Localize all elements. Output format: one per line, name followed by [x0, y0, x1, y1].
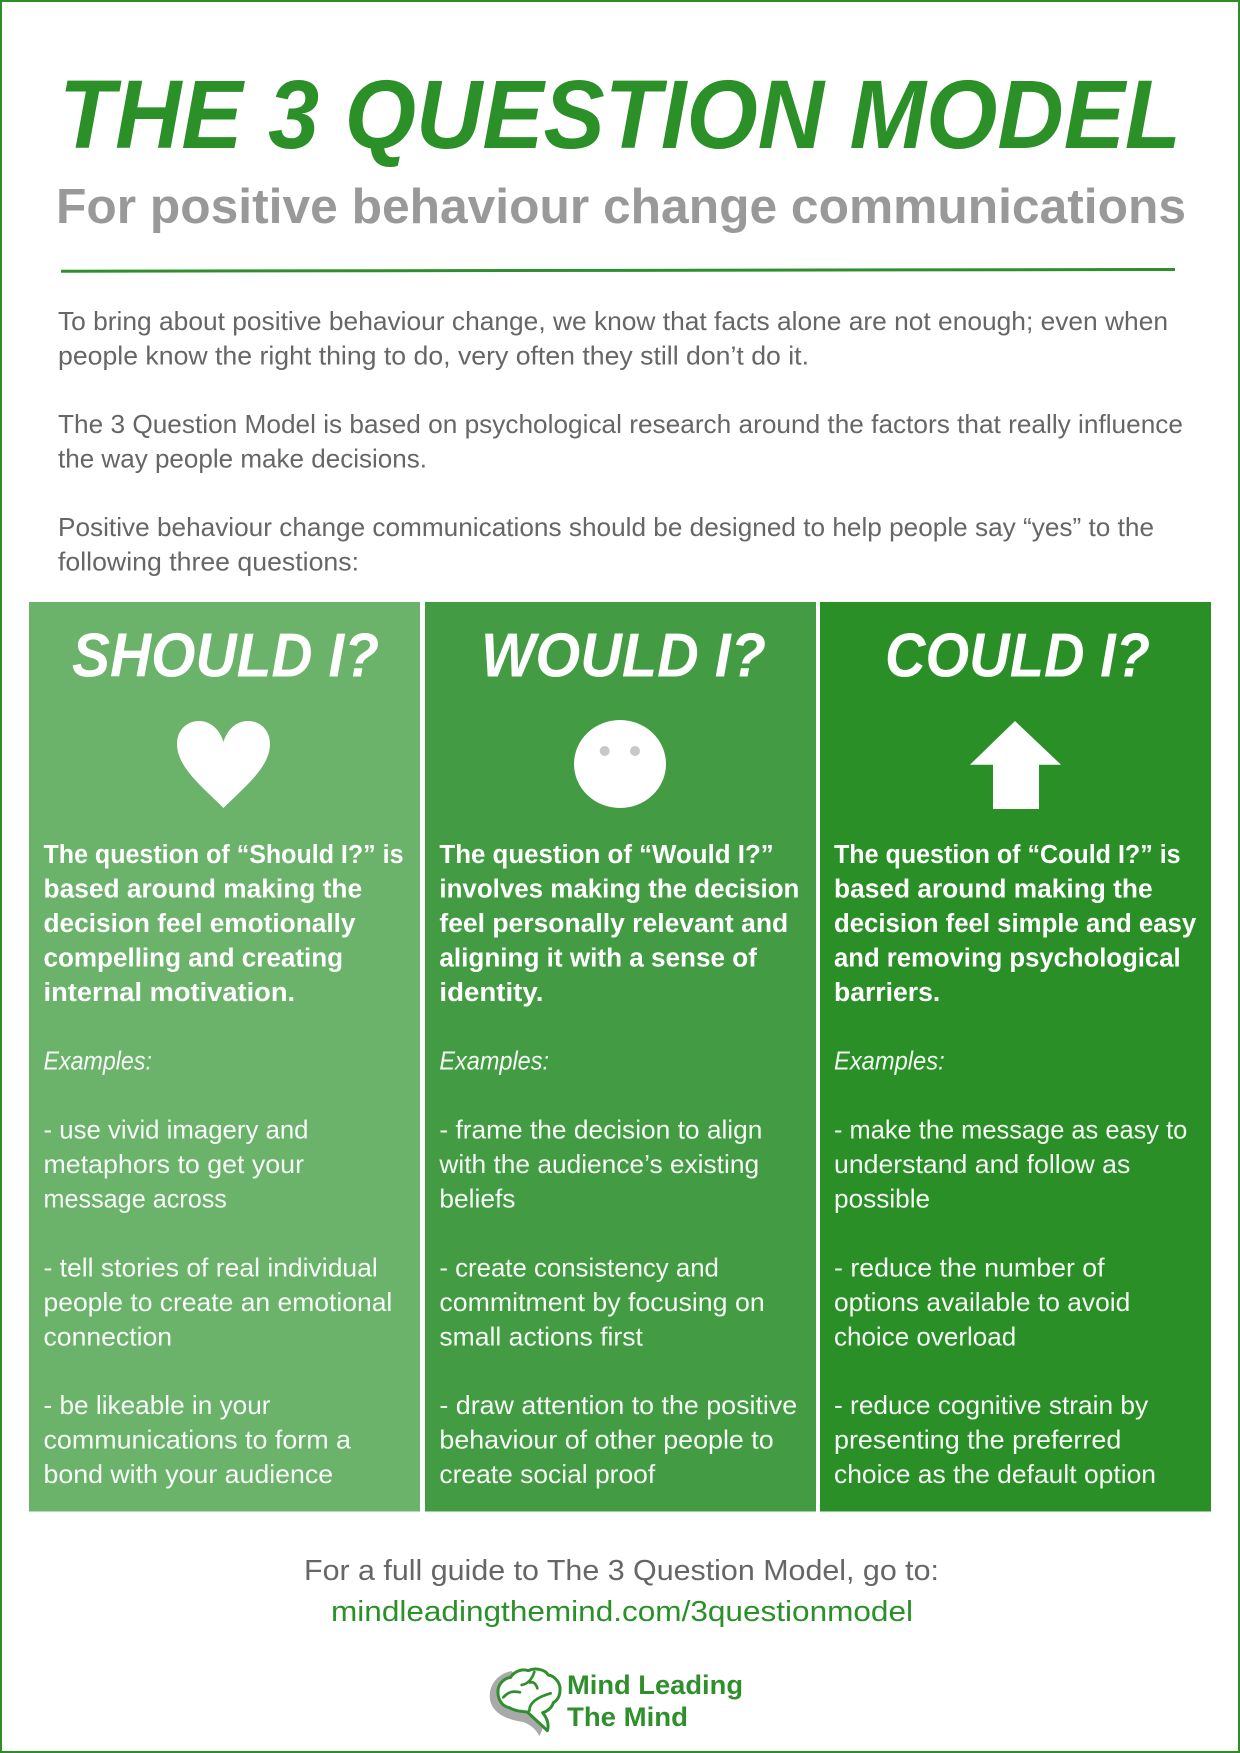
text: Should I? description: based around making the — [44, 876, 362, 904]
text: Could I? description: based around making the — [834, 876, 1153, 904]
text: Could I? description: barriers. — [834, 979, 940, 1007]
text: Would I? examples: beliefs — [439, 1184, 515, 1214]
intro text — [58, 306, 1183, 576]
intro text: following three questions: — [58, 546, 359, 576]
text: Could I? description: The question of “Could I?” is — [834, 841, 1181, 869]
icon: up arrow — [970, 721, 1061, 809]
heading: Would I?: WOULD I? — [481, 622, 766, 690]
text: Would I? examples: - frame the decision to align — [439, 1115, 762, 1145]
text: Should I? examples: metaphors to get your — [44, 1149, 304, 1179]
footer call to action: mindleadingthemind.com/3questionmodel — [331, 1596, 913, 1628]
intro text: To bring about positive behaviour change, we know that facts alone are not enough; even when — [58, 306, 1168, 336]
text: Should I? examples — [44, 1046, 392, 1489]
text: Could I? examples: possible — [834, 1184, 930, 1214]
panel: Should I? — [29, 602, 420, 1512]
text: Should I? examples: - use vivid imagery and — [44, 1115, 308, 1145]
text: Could I? examples: - reduce the number of — [834, 1252, 1105, 1282]
panel: Would I? — [425, 602, 816, 1512]
text: Would I? description: involves making the decision — [439, 876, 799, 904]
text: Would I? examples: small actions first — [439, 1321, 644, 1351]
text: Could I? examples: - make the message as easy to — [834, 1115, 1187, 1145]
text: Could I? examples: understand and follow as — [834, 1149, 1130, 1179]
subtitle: For positive behaviour change communications — [56, 180, 1186, 234]
text: Should I? description: internal motivation. — [44, 979, 295, 1007]
text: Could I? examples: - reduce cognitive strain by — [834, 1390, 1148, 1420]
text: Could I? examples: presenting the preferred — [834, 1425, 1121, 1455]
heading: Could I?: COULD I? — [885, 622, 1150, 690]
text: Should I? examples: bond with your audience — [44, 1459, 333, 1489]
text: Would I? description — [439, 841, 799, 1007]
text: Would I? examples: - draw attention to the positive — [439, 1390, 797, 1420]
footer call to action: For a full guide to The 3 Question Model, go to: — [304, 1555, 939, 1587]
text: Could I? examples: Examples: — [834, 1046, 945, 1076]
text: Would I? description: identity. — [439, 979, 543, 1007]
text: Would I? examples: Examples: — [439, 1046, 549, 1076]
logo: Mind Leading The Mind — [490, 1669, 743, 1736]
icon: heart — [177, 721, 270, 808]
icon: face — [574, 720, 666, 808]
logo text: Mind Leading — [567, 1670, 743, 1700]
logo text: The Mind — [567, 1702, 688, 1732]
intro text: people know the right thing to do, very often they still don’t do it. — [58, 340, 809, 370]
text: Would I? examples: with the audience’s existing — [438, 1149, 759, 1179]
text: Should I? examples: message across — [44, 1184, 227, 1214]
text: Should I? examples: Examples: — [44, 1046, 152, 1076]
text: Could I? examples: choice as the default option — [834, 1459, 1156, 1489]
text: Would I? examples — [438, 1046, 797, 1489]
text: Would I? examples: behaviour of other people to — [439, 1425, 774, 1455]
intro text: The 3 Question Model is based on psychological research around the factors that really influence — [58, 409, 1183, 439]
text: Could I? examples — [834, 1046, 1187, 1489]
text: Should I? examples: - tell stories of real individual — [44, 1252, 378, 1282]
text: Could I? description: and removing psychological — [834, 944, 1181, 972]
text: Could I? description: decision feel simple and easy — [834, 910, 1197, 938]
text: Should I? examples: connection — [44, 1321, 172, 1351]
heading: Should I?: SHOULD I? — [72, 622, 379, 690]
text: Should I? description — [44, 841, 404, 1007]
intro text: the way people make decisions. — [58, 444, 427, 474]
text: Could I? description — [834, 841, 1197, 1007]
text: Should I? description: decision feel emotionally — [44, 910, 356, 938]
title: THE 3 QUESTION MODEL — [59, 60, 1181, 169]
text: Could I? examples: options available to avoid — [834, 1287, 1130, 1317]
text: Would I? examples: - create consistency and — [439, 1252, 719, 1282]
intro text: Positive behaviour change communications should be designed to help people say “yes” to the — [58, 512, 1154, 542]
text: Should I? examples: people to create an emotional — [44, 1287, 392, 1317]
text: Could I? examples: choice overload — [834, 1321, 1016, 1351]
text: Should I? examples: - be likeable in your — [44, 1390, 271, 1420]
text: Would I? description: aligning it with a sense of — [439, 944, 757, 972]
icon: brain with speech bubble — [490, 1669, 560, 1736]
text: Would I? examples: create social proof — [439, 1459, 656, 1489]
text: Would I? examples: commitment by focusing on — [439, 1287, 765, 1317]
logo text — [567, 1670, 743, 1732]
panel: Could I? — [820, 602, 1211, 1512]
text: Would I? description: The question of “Would I?” — [439, 841, 774, 869]
footer call to action — [304, 1555, 939, 1628]
text: Would I? description: feel personally relevant and — [439, 910, 788, 938]
text: Should I? description: The question of “Should I?” is — [44, 841, 404, 869]
text: Should I? description: compelling and creating — [44, 944, 343, 972]
text: Should I? examples: communications to form a — [44, 1425, 352, 1455]
